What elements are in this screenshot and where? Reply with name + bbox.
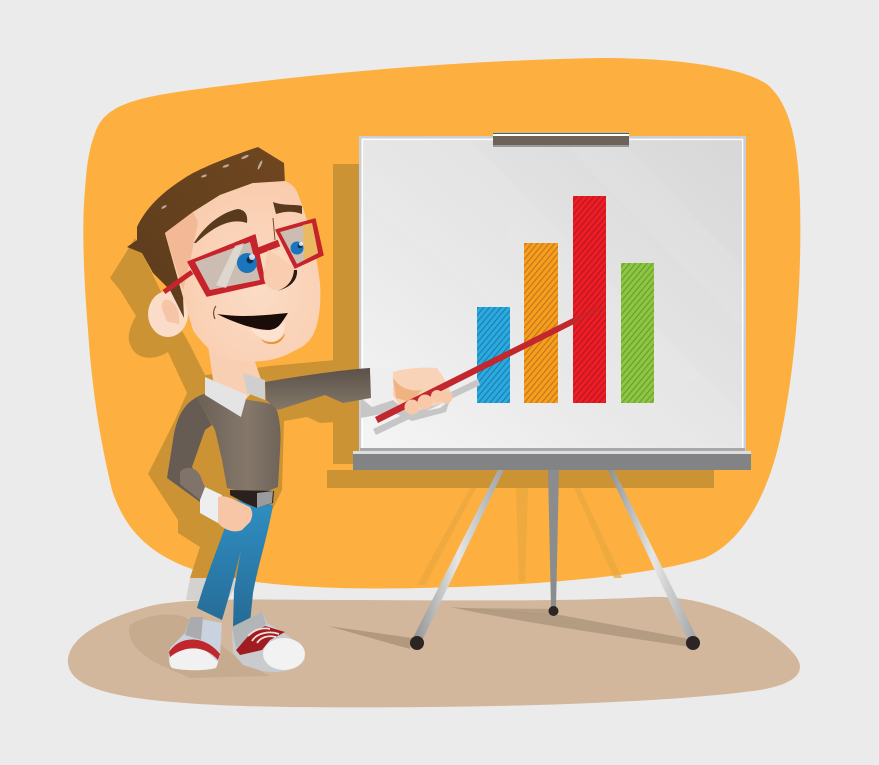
right hand palm	[393, 368, 452, 413]
lower lip	[250, 322, 285, 341]
floor shadow of feet	[129, 615, 270, 678]
lens reflections	[216, 243, 244, 288]
floor	[68, 597, 800, 707]
nose	[264, 250, 296, 290]
pointer and hand shadow on board	[361, 379, 480, 435]
hip arm	[167, 397, 212, 502]
left lens	[195, 242, 260, 290]
glasses temple arm	[164, 272, 192, 292]
hair	[127, 147, 285, 318]
left eye	[237, 253, 257, 273]
left leg	[412, 470, 504, 643]
right lens	[280, 223, 318, 264]
belt	[230, 490, 274, 508]
foot: right	[686, 636, 700, 650]
orange backdrop blob	[83, 58, 800, 588]
foot: middle	[548, 606, 558, 616]
right cuff	[370, 368, 395, 407]
right lens frame	[276, 219, 323, 268]
left hand	[218, 496, 252, 531]
mouth	[217, 313, 288, 330]
left lens frame	[188, 235, 265, 296]
glasses bridge	[256, 243, 279, 252]
right leg	[608, 470, 698, 643]
chin shadow	[261, 333, 285, 344]
faded shadow on the wall gap	[186, 578, 240, 600]
shoe: left	[169, 617, 222, 670]
nose crease	[273, 218, 275, 240]
easel legs	[328, 470, 700, 650]
forehead shading	[165, 212, 198, 290]
shoe: right	[232, 612, 305, 672]
collar	[205, 373, 265, 417]
left cuff	[200, 487, 222, 523]
hair highlights	[161, 154, 263, 210]
right eye	[290, 242, 304, 254]
ear	[148, 291, 188, 337]
pointing arm	[265, 368, 371, 410]
wall shadow: presenter	[110, 238, 335, 578]
middle leg	[548, 470, 559, 608]
right eyebrow	[273, 202, 302, 214]
smile crease	[214, 306, 216, 319]
bar: red	[573, 196, 606, 403]
bar: orange	[524, 243, 558, 403]
tray	[353, 448, 751, 470]
right hand fingers	[404, 390, 452, 414]
pointer stick	[375, 305, 603, 423]
foot: left	[410, 636, 424, 650]
bar: green	[621, 263, 654, 403]
board surface	[360, 137, 745, 451]
torso	[197, 393, 280, 495]
whiteboard	[353, 133, 751, 470]
presenter character	[127, 147, 603, 678]
bar: blue	[477, 307, 510, 403]
neck	[208, 345, 262, 400]
left eyebrow	[194, 209, 247, 243]
wall shadow: easel legs	[417, 488, 622, 585]
sweater	[167, 368, 371, 502]
floor shadows of legs	[450, 607, 695, 647]
board reflections	[362, 139, 745, 449]
face	[164, 181, 323, 362]
jeans	[197, 500, 273, 627]
wall shadow: board and tray	[327, 164, 714, 488]
top clip	[493, 133, 629, 147]
